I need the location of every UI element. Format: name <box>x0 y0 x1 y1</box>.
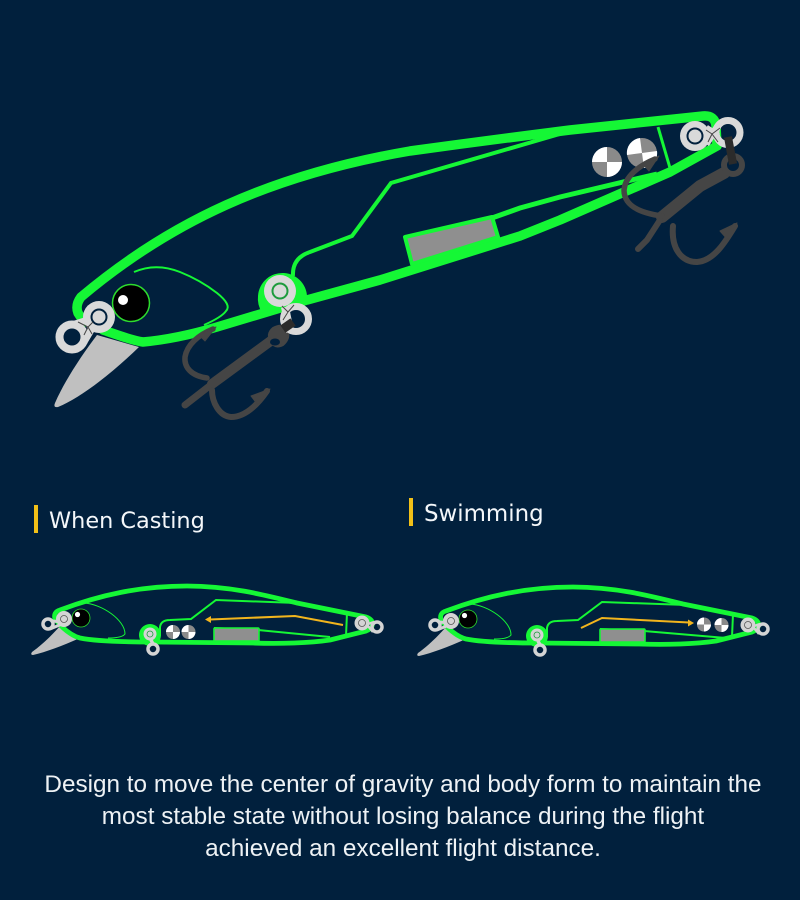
body outline <box>55 586 372 643</box>
caption text: most stable state without losing balance during the flight <box>102 803 704 830</box>
caption text <box>44 771 762 862</box>
weights <box>166 625 196 639</box>
gill line <box>134 267 228 325</box>
body outline <box>441 587 758 644</box>
caption text: Design to move the center of gravity and body form to maintain the <box>44 771 762 798</box>
caption text: achieved an excellent flight distance. <box>205 835 601 862</box>
bib <box>417 627 466 656</box>
eyelet rings <box>43 611 382 654</box>
belly bump <box>139 624 161 646</box>
weight chamber <box>600 629 645 642</box>
inner gravity channel <box>293 131 570 276</box>
belly hook <box>185 322 293 417</box>
eye <box>72 609 90 627</box>
belly eyelet rings <box>264 275 308 332</box>
gill line <box>470 604 511 639</box>
inner channel <box>547 602 733 638</box>
bib <box>31 626 80 655</box>
heading marker: swimming <box>409 498 413 526</box>
weight chamber <box>405 217 498 264</box>
sliding weights <box>592 138 657 177</box>
weights <box>697 618 728 632</box>
eye <box>459 610 477 628</box>
nose eyelet rings <box>60 301 115 350</box>
inner channel <box>160 600 347 637</box>
tail hook <box>624 137 742 262</box>
belly bump <box>526 625 548 647</box>
heading marker: when casting <box>34 505 38 533</box>
small lure: when casting <box>31 586 382 655</box>
arrow: weights slide forward <box>581 618 694 628</box>
gill line <box>84 603 125 638</box>
body outline <box>77 116 717 342</box>
weight chamber <box>214 628 259 641</box>
small lure: swimming <box>417 587 768 656</box>
heading: when casting: When Casting <box>49 508 205 534</box>
eye <box>112 284 150 322</box>
bib <box>54 335 139 407</box>
main lure illustration <box>54 116 742 417</box>
belly eyelet bump <box>258 273 307 313</box>
tail eyelet rings <box>680 120 740 164</box>
arrow: weights slide back <box>205 616 343 625</box>
eyelet rings <box>430 613 768 655</box>
heading: swimming: Swimming <box>424 501 544 527</box>
